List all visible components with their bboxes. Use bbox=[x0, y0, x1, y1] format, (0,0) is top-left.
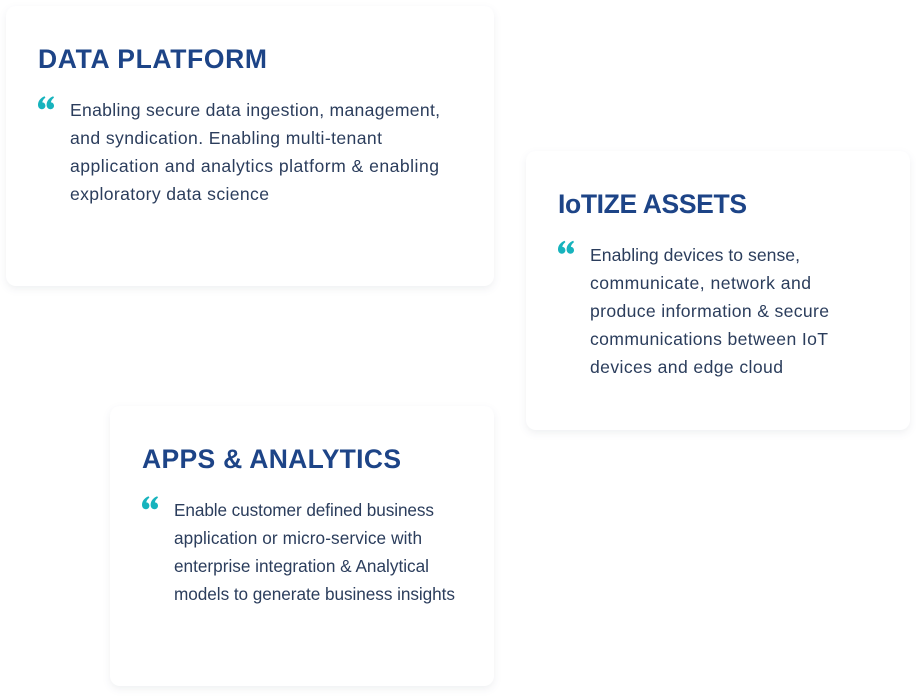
text block: apps and analytics description: Enable customer defined business bbox=[174, 500, 434, 520]
text block: iotize assets description: Enabling devices to sense, bbox=[590, 245, 800, 265]
text block: data platform description: Enabling secure data ingestion, management, bbox=[70, 100, 440, 120]
text block: data platform description: and syndication. Enabling multi-tenant bbox=[70, 128, 382, 148]
icon: quote mark bbox=[38, 96, 54, 109]
icon: quote mark bbox=[142, 496, 158, 509]
panel background: data platform bbox=[6, 6, 494, 286]
text block: apps and analytics description: application or micro-service with bbox=[174, 528, 422, 548]
text block: apps and analytics description bbox=[174, 500, 455, 604]
heading: apps and analytics: APPS & ANALYTICS bbox=[142, 444, 401, 474]
panel background: apps and analytics bbox=[110, 406, 494, 686]
panel: apps and analytics bbox=[110, 406, 494, 686]
text block: apps and analytics description: models to generate business insights bbox=[174, 584, 455, 604]
panel: data platform bbox=[6, 6, 494, 286]
heading: data platform: DATA PLATFORM bbox=[38, 44, 267, 74]
text block: iotize assets description: communicate, network and bbox=[590, 273, 811, 293]
text block: data platform description bbox=[70, 100, 440, 204]
panel: iotize assets bbox=[526, 151, 910, 430]
text block: iotize assets description: devices and edge cloud bbox=[590, 357, 783, 377]
icon: quote mark bbox=[558, 241, 574, 254]
text block: iotize assets description bbox=[590, 245, 829, 377]
text block: data platform description: exploratory data science bbox=[70, 184, 269, 204]
text block: data platform description: application and analytics platform & enabling bbox=[70, 156, 439, 176]
text block: iotize assets description: produce information & secure bbox=[590, 301, 829, 321]
panel background: iotize assets bbox=[526, 151, 910, 430]
text block: iotize assets description: communications between IoT bbox=[590, 329, 828, 349]
text block: apps and analytics description: enterprise integration & Analytical bbox=[174, 556, 429, 576]
heading: iotize assets: IoTIZE ASSETS bbox=[558, 189, 747, 219]
